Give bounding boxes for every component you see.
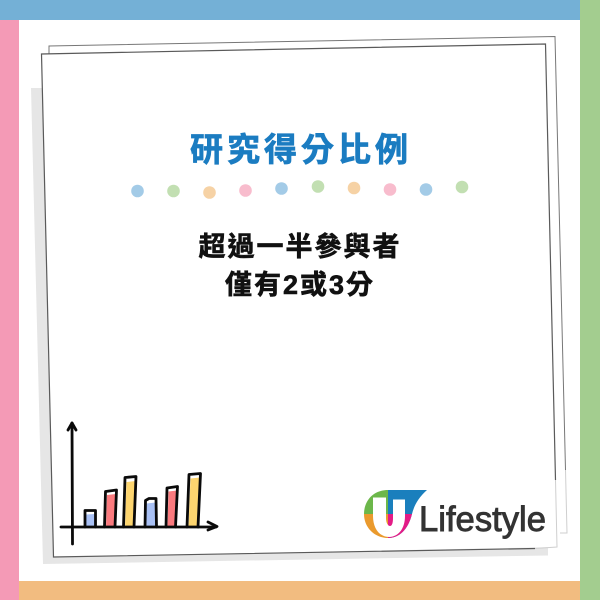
logo: U Lifestyle [364, 490, 546, 539]
frame: green right bar [580, 0, 600, 600]
body text: 超過一半參與者 [198, 232, 402, 262]
title: 研究得分比例 [190, 131, 412, 168]
frame: orange bottom bar [19, 581, 580, 600]
frame: blue top bar [0, 0, 580, 20]
front paper sheet [42, 44, 557, 557]
body text: 僅有2或3分 [225, 270, 375, 300]
icon: bar chart doodle [61, 423, 217, 544]
dotted divider [131, 180, 468, 199]
paper shadow [31, 88, 548, 564]
logo wordmark: Lifestyle [419, 500, 546, 539]
body text [198, 232, 402, 300]
back paper sheet [49, 36, 567, 540]
frame: pink left bar [0, 20, 19, 600]
